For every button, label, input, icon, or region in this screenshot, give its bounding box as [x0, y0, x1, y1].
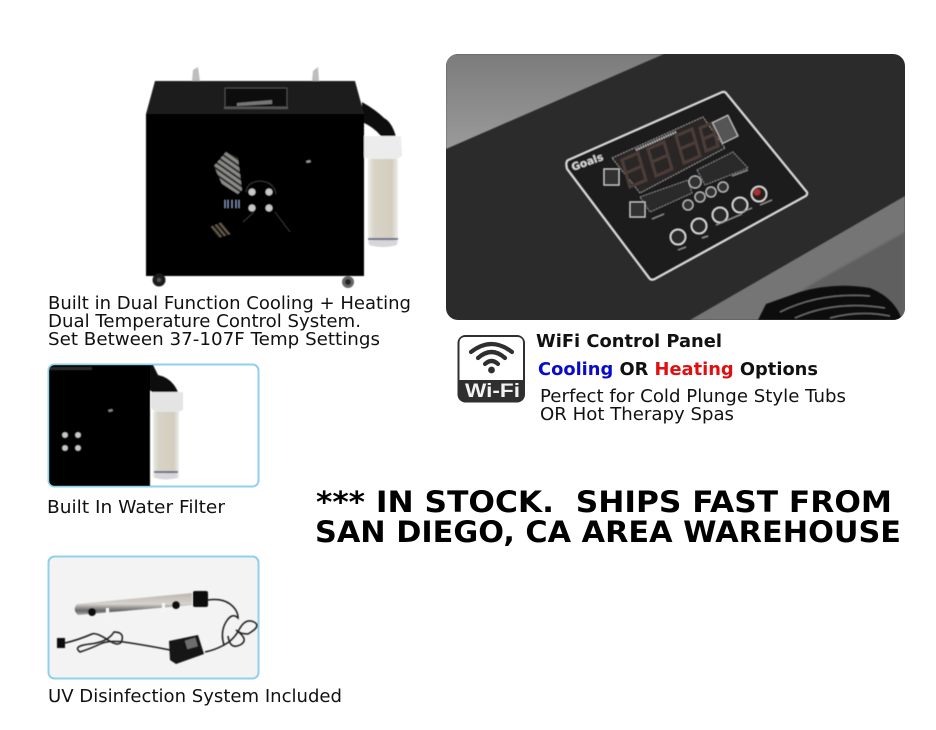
wheels: [152, 274, 166, 286]
callout: in stock: *** IN STOCK. SHIPS FAST FROM: [316, 485, 892, 519]
icon: Wi-Fi badge: [458, 335, 525, 402]
text: perfect for tubs and spas: OR Hot Therapy Spas: [540, 405, 734, 425]
caption: UV system: UV Disinfection System Included: [48, 687, 342, 707]
control panel faceplate: [566, 92, 807, 280]
text: perfect for tubs and spas: Perfect for Cold Plunge Style Tubs: [540, 387, 846, 407]
hoses: [362, 102, 396, 140]
cables: [65, 600, 257, 652]
power plug: [57, 638, 65, 648]
caption: water filter: Built In Water Filter: [47, 498, 226, 518]
fan grille: [214, 152, 242, 194]
cabinet front: [146, 114, 364, 276]
fan hub bolts: [248, 188, 256, 196]
feature text: dual function: [48, 294, 411, 350]
feature text: dual function: Set Between 37-107F Temp Settings: [48, 330, 380, 350]
water filter: [363, 136, 402, 247]
heading: cooling or heating options: Cooling OR Heating Options: [538, 360, 818, 380]
product photo: chiller unit: [146, 67, 402, 288]
photo: built in water filter: [48, 364, 258, 486]
feature text: dual function: Dual Temperature Control System.: [48, 312, 361, 332]
handles: [192, 67, 319, 81]
text: perfect for tubs and spas: [540, 387, 846, 425]
power adapter: [169, 635, 204, 664]
top control panel: [224, 88, 288, 109]
feature text: dual function: Built in Dual Function Cooling + Heating: [48, 294, 411, 314]
callout: in stock: SAN DIEGO, CA AREA WAREHOUSE: [315, 515, 901, 549]
cables: [758, 286, 902, 320]
photo: UV disinfection system: [48, 556, 258, 678]
heading: WiFi control panel: WiFi Control Panel: [536, 332, 722, 352]
cabinet top: [146, 81, 364, 114]
control panel faceplate: Goals: [570, 151, 605, 174]
icon: Wi-Fi badge: Wi-Fi: [465, 380, 520, 402]
photo: control panel closeup: [446, 54, 905, 320]
UV tube: [75, 593, 192, 615]
callout: in stock: [315, 485, 901, 549]
